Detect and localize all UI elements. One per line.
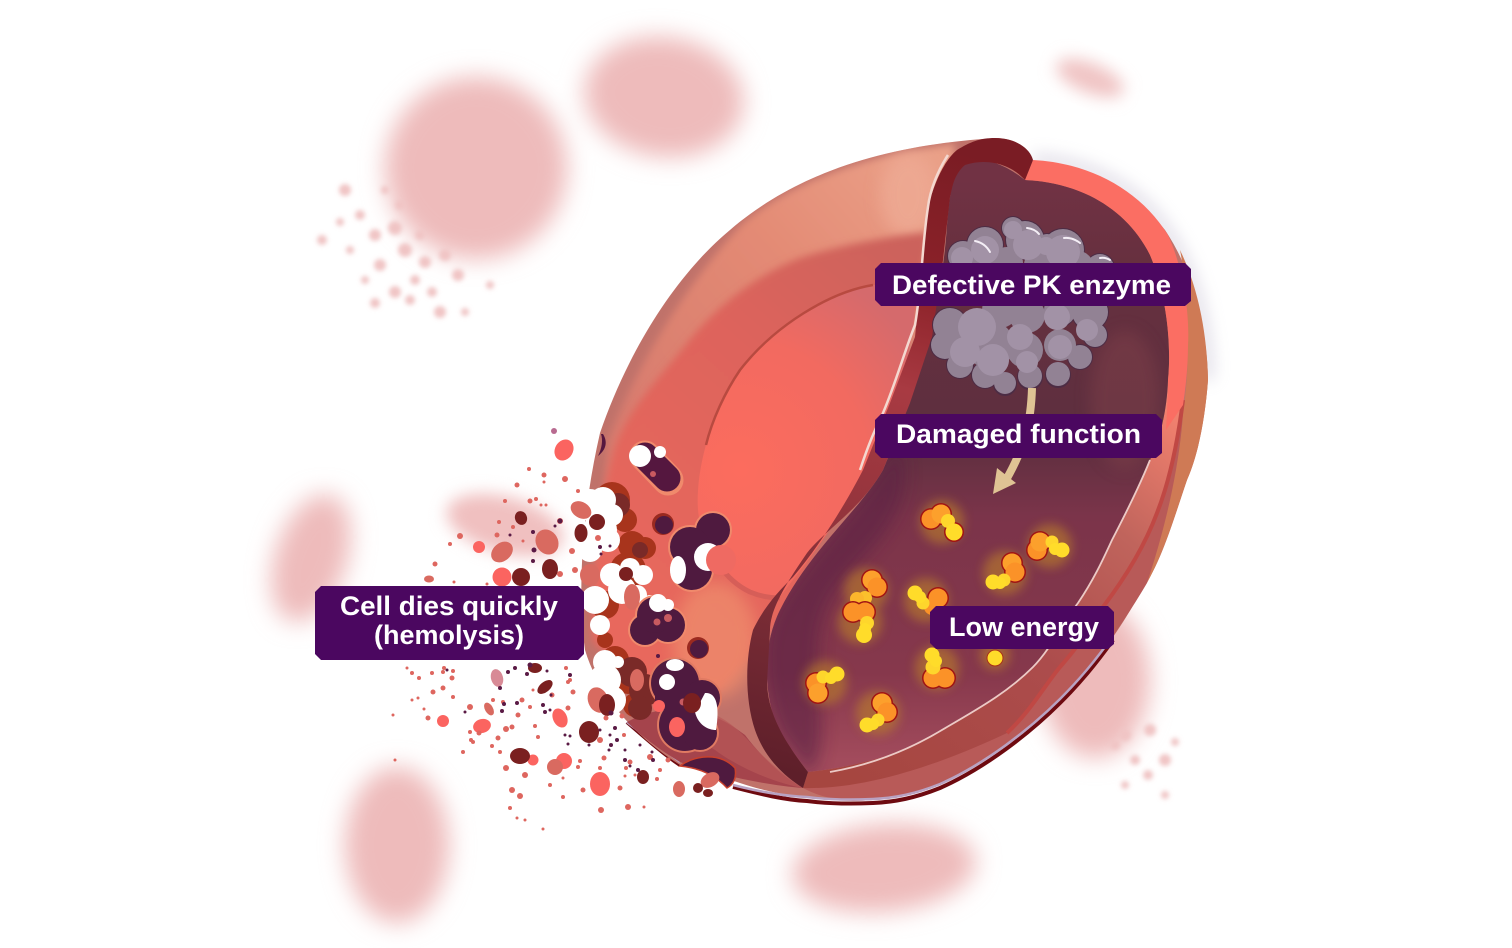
molecule 8 — [922, 648, 956, 689]
label: low energy — [930, 606, 1114, 649]
red blood cell cross-section — [581, 138, 1208, 804]
top edge nick — [598, 434, 606, 456]
bright fragments — [437, 436, 685, 796]
enzyme body — [931, 217, 1114, 394]
hemolysis: ruptured holes in the membrane — [574, 434, 736, 796]
soft shadow behind cell — [1033, 160, 1207, 380]
molecule 10 — [860, 692, 898, 732]
bottom crescent hole — [680, 757, 736, 796]
lower-left salmon glow — [673, 582, 757, 698]
brown rupture underlay — [591, 482, 656, 717]
label: damaged function — [875, 414, 1162, 458]
cell bottom edge lines — [627, 640, 1113, 804]
white scalloped gaps — [574, 487, 657, 721]
escaping cell fragments — [392, 428, 722, 830]
molecule 7 — [986, 650, 1004, 666]
capsule hole — [629, 445, 668, 480]
outer membrane face — [581, 138, 1208, 801]
fine dark debris — [446, 518, 660, 772]
upper salmon band — [604, 142, 958, 480]
label: cell dies quickly (hemolysis): (hemolysis) — [374, 620, 524, 650]
mauve band — [803, 413, 1183, 801]
interior cytoplasm — [767, 160, 1169, 772]
rim dark line — [1007, 400, 1183, 733]
top highlight — [881, 150, 930, 232]
background: blurred blood cells — [256, 26, 1179, 923]
label: cell dies quickly (hemolysis): Cell dies quickly — [340, 591, 558, 621]
molecule 2 — [1026, 531, 1070, 561]
label: defective PK enzyme: Defective PK enzyme — [892, 270, 1171, 300]
molecule 9 — [805, 666, 844, 704]
molecule 6 — [908, 586, 949, 615]
label: low energy: Low energy — [949, 612, 1099, 642]
central dimple — [698, 285, 915, 598]
interior shadows — [764, 330, 1160, 775]
lower left bands — [627, 709, 803, 788]
label: cell dies quickly (hemolysis) — [315, 586, 584, 660]
enzyme outline layer — [930, 216, 1115, 396]
right orange skin — [1147, 250, 1208, 583]
ATP molecules — [803, 500, 1072, 735]
red inner band — [592, 232, 930, 735]
molecule 3 — [986, 552, 1026, 590]
kidney hole — [668, 511, 736, 592]
dark fragments — [510, 509, 713, 797]
label: defective PK enzyme — [875, 263, 1191, 306]
label: damaged function: Damaged function — [896, 419, 1141, 449]
membrane white lines — [860, 155, 948, 470]
arrow: enzyme to low energy — [993, 388, 1032, 494]
molecule 1 — [920, 503, 964, 542]
fine salmon debris — [392, 428, 670, 830]
molecule 5 — [842, 601, 876, 643]
enzyme highlights — [950, 221, 1098, 376]
pale salmon fragments — [424, 498, 722, 797]
lilac edge line — [627, 636, 1113, 800]
cut wall — [747, 138, 1033, 788]
small circular holes — [652, 513, 709, 659]
large lower hole — [649, 657, 722, 753]
central hole — [628, 594, 687, 647]
soft face shading — [592, 144, 955, 735]
lower rim band — [803, 370, 1184, 788]
molecule 4 — [850, 569, 888, 606]
pink fragment — [489, 668, 505, 688]
salmon rim top right — [1025, 160, 1188, 430]
enzyme cluster — [930, 216, 1115, 396]
